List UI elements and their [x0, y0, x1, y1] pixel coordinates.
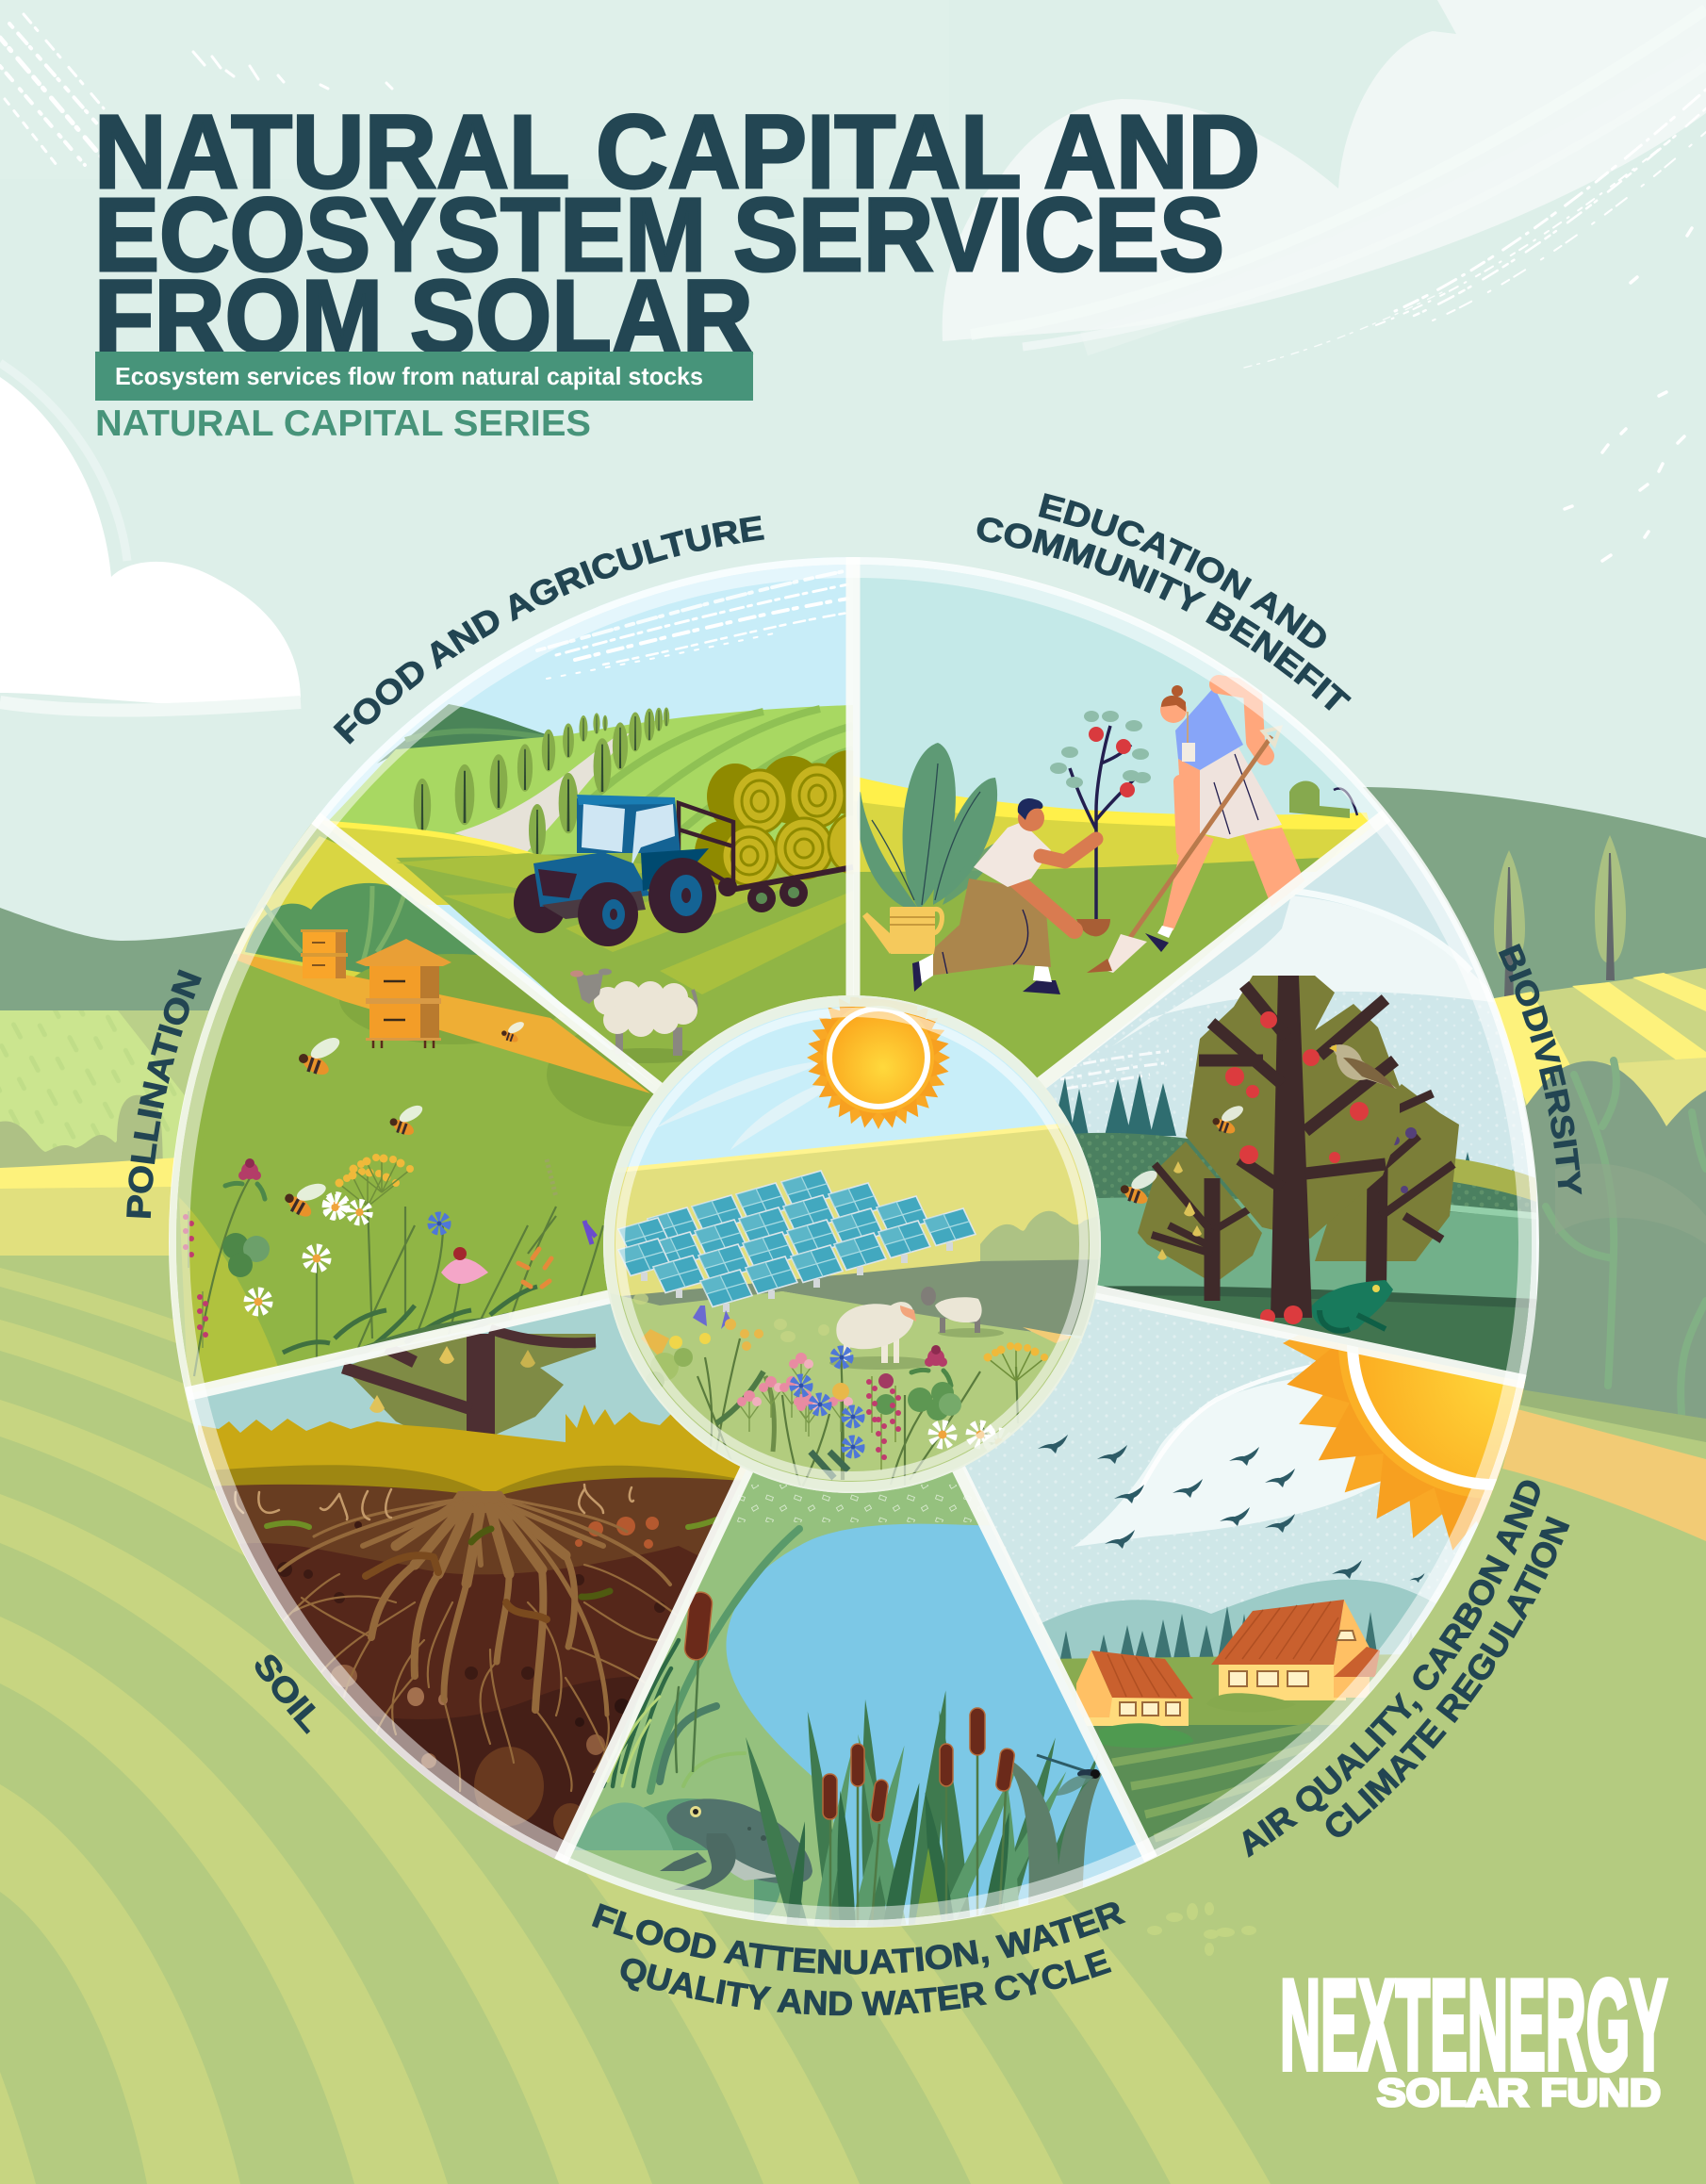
meadow — [1074, 1197, 1536, 1320]
left reeds — [603, 1529, 799, 1791]
stones — [277, 1517, 665, 1841]
title — [94, 94, 1260, 375]
label: biodiversity: BIODIVERSITY — [1499, 944, 1582, 1195]
bushes — [245, 882, 478, 973]
roots — [235, 1485, 679, 1791]
subtitle bar: Ecosystem services flow from natural capital stocks — [115, 362, 703, 390]
title: FROM SOLAR — [94, 259, 753, 375]
large beehive — [355, 939, 451, 1048]
outer ring — [172, 561, 1535, 1924]
panel: education and community benefit — [844, 551, 1409, 1117]
trailer — [679, 803, 853, 912]
left field — [0, 1010, 264, 1171]
tree lined road — [454, 733, 630, 853]
spokes between panels — [187, 557, 1525, 1862]
small beehive — [301, 929, 348, 978]
sheep — [570, 969, 703, 1063]
lighter foreground wedge — [179, 1197, 277, 1386]
left cloud — [0, 377, 301, 705]
label: air quality carbon and: AIR QUALITY, CARBON AND — [1242, 1480, 1540, 1858]
yellow hill band — [338, 828, 517, 905]
label: soil: SOIL — [254, 1655, 316, 1734]
worms — [267, 1519, 716, 1619]
white brush speckle right — [1244, 90, 1706, 561]
label: pollination: POLLINATION — [126, 969, 202, 1218]
bottom striped fields — [0, 1256, 1320, 2184]
far hill — [377, 704, 545, 764]
solar panel array — [618, 1171, 976, 1312]
yellow hill — [234, 836, 390, 977]
panel: air quality — [943, 1095, 1706, 1885]
reed clump — [730, 1689, 1103, 1937]
conifers — [1060, 1606, 1418, 1659]
distant hills — [1027, 1580, 1470, 1753]
label: climate regulation: CLIMATE REGULATION — [1325, 1516, 1570, 1837]
main apple tree — [1186, 976, 1400, 1324]
hay bales — [695, 750, 854, 885]
soil layers — [215, 1478, 733, 1862]
sun — [1246, 1095, 1706, 1591]
sparrow — [1329, 1044, 1397, 1089]
man planting — [912, 798, 1096, 994]
title: NATURAL CAPITAL AND — [94, 94, 1260, 210]
birds — [1038, 1435, 1425, 1583]
striped field — [1065, 1725, 1414, 1862]
far hills — [1320, 1156, 1536, 1225]
right poplars — [1494, 835, 1626, 997]
chippings — [735, 1485, 1018, 1522]
left bushes — [0, 1095, 163, 1169]
poplar row — [414, 708, 669, 857]
tree line — [980, 1211, 1112, 1263]
label: quality and water cycle: QUALITY AND WATER CYCLE — [620, 1949, 1112, 2015]
cattails — [683, 1591, 1015, 1923]
large sheep — [829, 1302, 933, 1370]
farmhouse right — [1211, 1600, 1380, 1700]
meadow shading — [170, 954, 650, 1414]
right ground and path — [943, 1386, 1706, 2184]
farmhouse left — [1076, 1650, 1193, 1726]
label: food and agriculture: FOOD AND AGRICULTURE — [333, 516, 764, 745]
left pear tree — [1138, 1141, 1262, 1301]
left hill — [0, 908, 254, 1018]
white brush speckle left — [0, 14, 392, 165]
tractor — [514, 795, 716, 946]
small sheep — [921, 1287, 1004, 1338]
cloud swoosh — [1074, 1376, 1414, 1547]
sky wisps — [655, 1060, 848, 1150]
green field — [853, 858, 1320, 1098]
subtitle bar — [95, 352, 753, 401]
distant bush — [1289, 780, 1350, 818]
orange path — [238, 953, 650, 1093]
meadow — [1037, 1654, 1414, 1734]
panel: biodiversity — [1018, 801, 1555, 1414]
series label: NATURAL CAPITAL SERIES — [95, 403, 591, 444]
pond — [726, 1524, 1206, 1932]
bees — [1121, 1103, 1246, 1207]
title: ECOSYSTEM SERVICES — [94, 177, 1224, 293]
circular labels — [126, 493, 1582, 2015]
centre ring — [609, 1001, 1095, 1487]
panel: flood attenuation — [556, 1433, 1206, 1953]
centre panel: solar farm — [594, 974, 1112, 1499]
dragonfly — [1037, 1755, 1100, 1796]
woman digging — [1087, 684, 1315, 973]
hedges — [1099, 1723, 1193, 1748]
top right cloud — [943, 0, 1706, 341]
yellow field — [853, 776, 1376, 943]
wildflower foreground — [641, 1305, 1048, 1489]
right tree — [1315, 1084, 1459, 1291]
label: education and: EDUCATION AND — [1039, 493, 1326, 649]
label: flood attenuation water: FLOOD ATTENUATION, WATER — [592, 1902, 1126, 1975]
ground — [1074, 1287, 1536, 1414]
pear tree — [341, 1325, 596, 1435]
shaded ground — [622, 1259, 1112, 1338]
sky brush sweeps — [971, 9, 1706, 347]
mounds — [566, 1798, 782, 1953]
grass — [198, 1404, 746, 1491]
panel: food and agriculture — [326, 558, 854, 1088]
right hill — [1357, 787, 1706, 1065]
clouds — [1112, 895, 1508, 1046]
sapling with apples — [1050, 711, 1151, 936]
bees — [282, 1020, 526, 1223]
logo: nextenergy solar fund: SOLAR FUND — [1377, 2071, 1661, 2114]
foreground field — [396, 853, 853, 1088]
panel: soil — [189, 1304, 741, 1862]
right striped field — [1489, 968, 1706, 1188]
big leaf plant — [857, 743, 1004, 910]
left yellow band — [0, 1158, 179, 1190]
sky brush — [537, 570, 848, 679]
wildflowers — [183, 1154, 603, 1376]
frog — [660, 1798, 812, 1890]
watering can — [862, 907, 942, 954]
label: community benefit: COMMUNITY BENEFIT — [976, 517, 1352, 711]
far field — [330, 705, 853, 855]
conifers — [1052, 1074, 1521, 1199]
field — [603, 1125, 1112, 1320]
sun — [795, 974, 962, 1141]
panel: pollination — [170, 818, 658, 1388]
right bushes — [1499, 1061, 1706, 1423]
meadow — [603, 1291, 1112, 1499]
green frog — [1312, 1280, 1393, 1334]
